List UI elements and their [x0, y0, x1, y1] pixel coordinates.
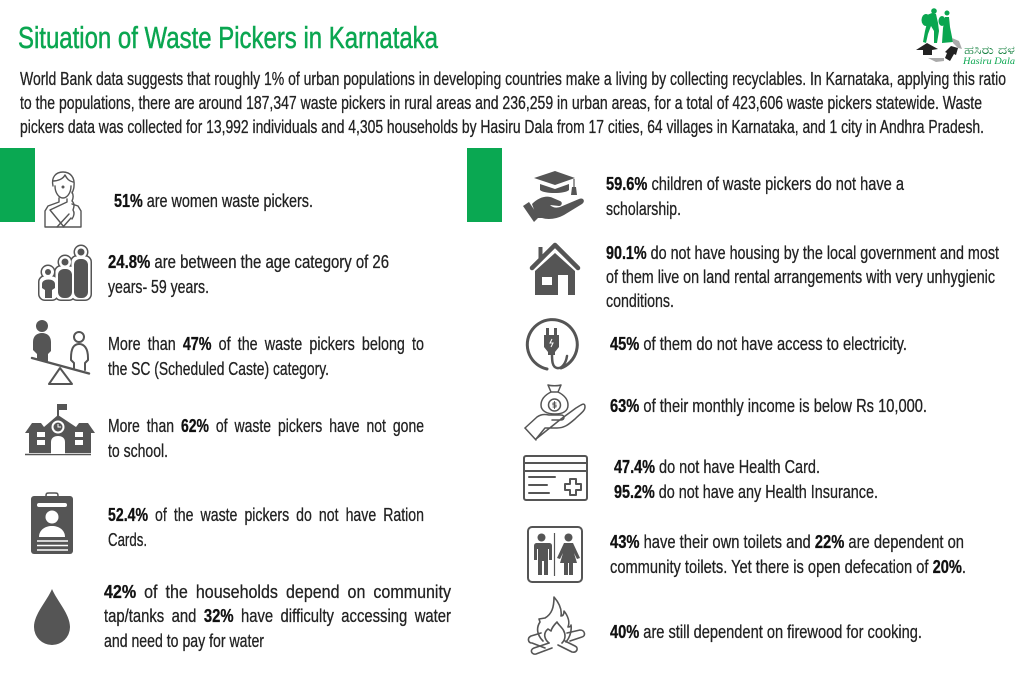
- text: age: years- 59 years.: [108, 277, 209, 297]
- green block: left: [0, 148, 35, 222]
- icon: toilet sign: [528, 527, 582, 582]
- text: water: and need to pay for water: [104, 631, 264, 651]
- text: health: 47.4% do not have Health Card.: [614, 457, 820, 477]
- text: electricity: 45% of them do not have access to electricity.: [610, 334, 907, 354]
- text: housing: conditions.: [606, 291, 674, 311]
- icon: water drop: [34, 589, 70, 645]
- text: housing: [606, 243, 999, 311]
- text: caste: [108, 334, 424, 379]
- icon: firewood fire: [528, 597, 584, 654]
- text: income: 63% of their monthly income is below Rs 10,000.: [610, 396, 927, 416]
- icon: woman: [45, 172, 81, 227]
- logo: Hasiru Dala: Hasiru Dala: [962, 57, 1015, 67]
- icon: ID badge: [31, 493, 73, 554]
- text: water: [104, 582, 451, 651]
- text: toilets: community toilets. Yet there is open defecation of 20%.: [610, 557, 966, 577]
- text: age: [108, 252, 389, 297]
- title: Situation of Waste Pickers in Karnataka: [18, 20, 439, 55]
- icon: house: [532, 245, 578, 295]
- text: toilets: 43% have their own toilets and 22% are dependent on: [610, 532, 964, 552]
- icon: money bag in hand: [525, 385, 585, 440]
- icon: graduation cap in hand: [523, 171, 584, 222]
- text: water: tap/tanks and 32% have difficulty accessing water: [104, 606, 451, 626]
- text: school: [108, 416, 424, 461]
- text: ration cards: 52.4% of the waste pickers do not have Ration: [108, 505, 424, 525]
- text: health: [614, 457, 878, 502]
- icon: school: [25, 404, 95, 454]
- text: school: to school.: [108, 441, 168, 461]
- text: toilets: [610, 532, 966, 577]
- text: age: 24.8% are between the age category of 26: [108, 252, 389, 272]
- text: ration cards: [108, 505, 424, 550]
- text: women: 51% are women waste pickers.: [114, 191, 313, 211]
- icon: electric plug: [527, 320, 577, 369]
- text: scholarship: 59.6% children of waste pickers do not have a: [606, 174, 905, 194]
- icon: health card: [524, 456, 587, 500]
- logo: Hasiru Dala: [916, 8, 1016, 67]
- text: scholarship: scholarship.: [606, 199, 681, 219]
- text: ration cards: Cards.: [108, 530, 147, 550]
- icon: seesaw: [32, 320, 89, 384]
- green block: right: [467, 148, 502, 222]
- logo: Hasiru Dala: ಹಸಿರು ದಳ: [964, 43, 1016, 57]
- intro paragraph: [20, 69, 1006, 137]
- text: school: More than 62% of waste pickers have not gone: [108, 416, 424, 436]
- text: scholarship: [606, 174, 905, 219]
- text: health: 95.2% do not have any Health Insurance.: [614, 482, 878, 502]
- text: caste: More than 47% of the waste pickers belong to: [108, 334, 424, 354]
- text: caste: the SC (Scheduled Caste) category.: [108, 359, 329, 379]
- text: water: 42% of the households depend on community: [104, 582, 451, 602]
- icon: family: [42, 248, 88, 298]
- text: firewood: 40% are still dependent on firewood for cooking.: [610, 622, 922, 642]
